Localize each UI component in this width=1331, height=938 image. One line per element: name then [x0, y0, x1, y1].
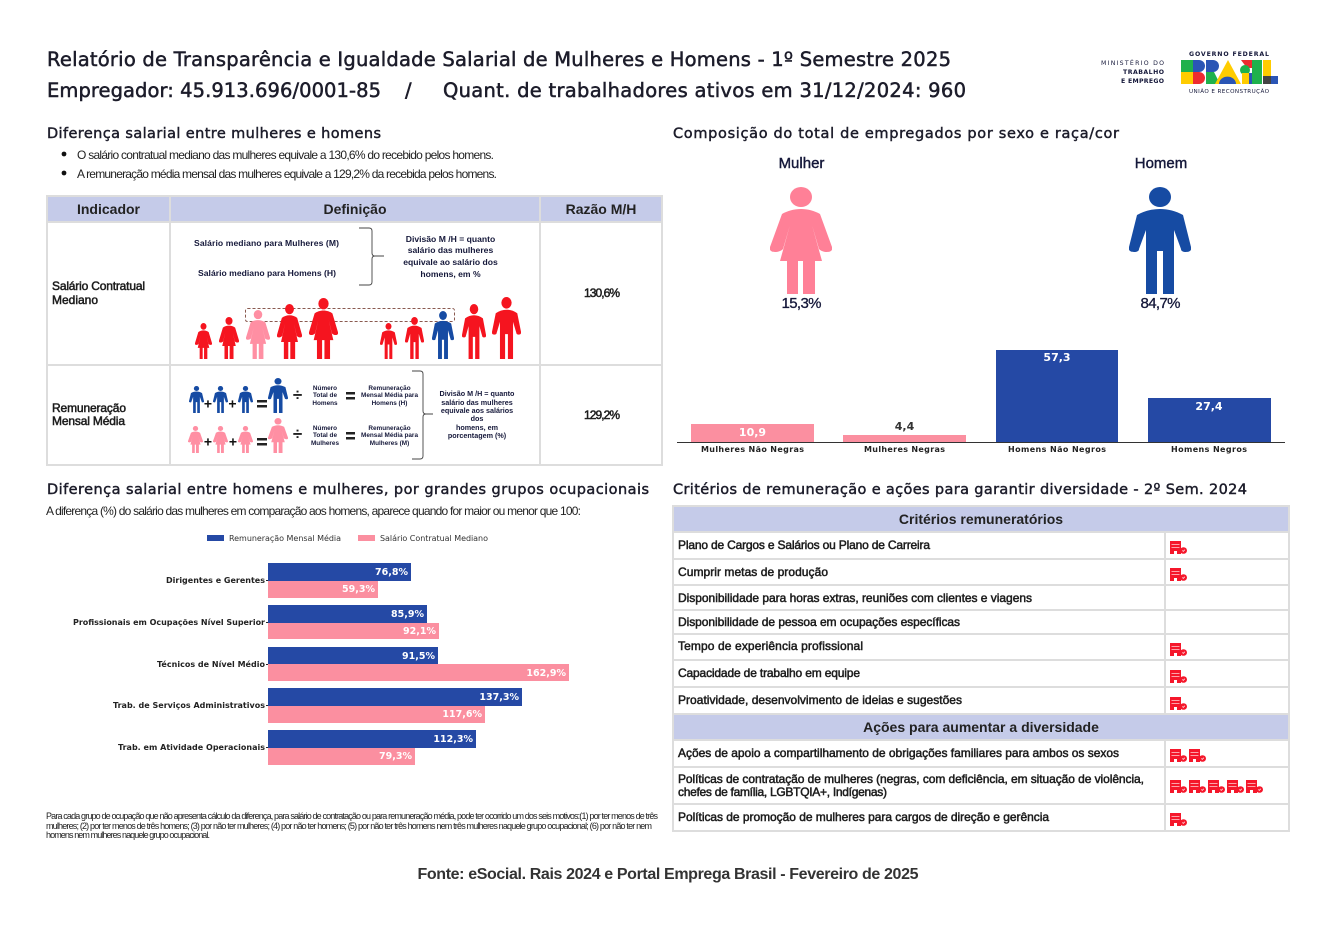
logo: ministério e governo federal	[1101, 51, 1278, 95]
panel: tabela de critérios: Ações para aumentar a diversidade	[863, 719, 1099, 735]
gráfico de barras horizontais: 117,6%	[442, 709, 482, 720]
logo: ministério e governo federal: UNIÃO E RECONSTRUÇÃO	[1189, 88, 1270, 95]
linha: remuneração mensal média: homens, em	[456, 423, 498, 432]
linha: salário contratual mediano: equivale ao salário dos	[403, 257, 498, 267]
heading: critérios: Critérios de remuneração e ações para garantir diversidade - 2º Sem. 2024	[673, 482, 1247, 498]
linha: salário contratual mediano: homens, em %	[420, 269, 481, 279]
gráfico de barras: composição: 4,4	[895, 420, 915, 433]
linha: remuneração mensal média: +	[228, 396, 237, 412]
title	[47, 48, 966, 102]
linha: remuneração mensal média: Mulheres	[311, 440, 339, 447]
legenda: Salário Contratual Mediano	[380, 534, 488, 543]
gráfico de barras horizontais: 76,8%	[375, 567, 408, 578]
figura: mulher 15,3%: Mulher	[779, 155, 824, 172]
linha: remuneração mensal média: Remuneração	[52, 401, 126, 415]
linha: remuneração mensal média: dos	[471, 414, 483, 423]
heading: grupos ocupacionais: Diferença salarial entre homens e mulheres, por grandes grupos ocupacionais	[47, 482, 649, 498]
linha: salário contratual mediano: 130,6%	[584, 286, 620, 300]
gráfico de barras horizontais	[73, 563, 569, 765]
bullet list: A remuneração média mensal das mulheres equivale a 129,2% da recebida pelos homens.	[77, 167, 497, 181]
nota de rodapé: homens nem mulheres naquele grupo ocupacional.	[46, 830, 210, 840]
gráfico de barras horizontais: 85,9%	[391, 609, 424, 620]
panel: tabela de critérios	[672, 505, 1290, 832]
logo: ministério e governo federal: GOVERNO FEDERAL	[1189, 51, 1269, 58]
linha: salário contratual mediano	[52, 228, 620, 359]
linha: remuneração mensal média: 129,2%	[584, 408, 620, 422]
gráfico de barras horizontais: 59,3%	[342, 584, 375, 595]
legenda	[207, 533, 488, 543]
linha: remuneração mensal média: Total de	[313, 432, 337, 439]
heading: composição: Composição do total de empregados por sexo e raça/cor	[673, 126, 1119, 142]
figura: mulher 15,3%	[770, 155, 832, 312]
linha: remuneração mensal média: Mulheres (M)	[370, 440, 409, 447]
panel: tabela de critérios: Políticas de contratação de mulheres (negras, com deficiência, em situação de violência,	[678, 772, 1144, 786]
gráfico de barras: composição: Mulheres Não Negras	[701, 445, 804, 454]
linha: remuneração mensal média: Total de	[313, 392, 337, 399]
gráfico de barras: composição	[677, 350, 1285, 454]
bullet list: O salário contratual mediano das mulheres equivale a 130,6% do recebido pelos homens.	[77, 148, 494, 162]
gráfico de barras: composição: Mulheres Negras	[864, 445, 945, 454]
linha: salário contratual mediano: Salário mediano para Mulheres (M)	[194, 238, 339, 248]
linha: remuneração mensal média: salário das mulheres	[441, 398, 513, 407]
panel: tabela de critérios: Proatividade, desenvolvimento de ideias e sugestões	[678, 693, 962, 707]
figura: homem 84,7%: Homem	[1135, 155, 1187, 172]
gráfico de barras horizontais: 79,3%	[379, 751, 412, 762]
panel: tabela de indicadores: Razão M/H	[566, 201, 636, 217]
linha: salário contratual mediano: Divisão M /H = quanto	[406, 234, 495, 244]
texto: descrição: A diferença (%) do salário das mulheres em comparação aos homens, aparece quando for maior ou menor que 100:	[46, 504, 581, 518]
panel: tabela de critérios: Disponibilidade para horas extras, reuniões com clientes e viagens	[678, 591, 1032, 605]
figura: homem 84,7%: 84,7%	[1140, 295, 1180, 312]
logo: ministério e governo federal: TRABALHO	[1123, 69, 1164, 76]
gráfico de barras: composição: Homens Negros	[1171, 445, 1247, 454]
linha: remuneração mensal média: Mensal Média para	[361, 432, 418, 439]
linha: remuneração mensal média: Homens (H)	[372, 400, 407, 407]
bullet list	[62, 148, 497, 181]
panel: tabela de critérios: Critérios remuneratórios	[899, 511, 1063, 527]
linha: remuneração mensal média: porcentagem (%)	[448, 431, 507, 440]
linha: remuneração mensal média: Homens	[312, 400, 338, 407]
linha: salário contratual mediano: Mediano	[52, 293, 98, 307]
gráfico de barras: composição: 57,3	[1043, 351, 1071, 364]
gráfico de barras horizontais: 137,3%	[479, 692, 519, 703]
title: /	[405, 79, 412, 102]
title: Empregador: 45.913.696/0001-85	[47, 79, 381, 102]
panel: tabela de critérios: Tempo de experiência profissional	[678, 639, 863, 653]
panel: tabela de critérios: chefes de família, LGBTQIA+, Indígenas)	[678, 785, 887, 799]
linha: remuneração mensal média: +	[229, 434, 237, 450]
linha: remuneração mensal média: Número	[313, 385, 337, 392]
gráfico de barras: composição: Homens Não Negros	[1008, 445, 1106, 454]
linha: remuneração mensal média: Mensal Média para	[361, 392, 418, 399]
linha: remuneração mensal média: Divisão M /H = quanto	[440, 389, 515, 398]
linha: salário contratual mediano: Salário Contratual	[52, 279, 145, 293]
panel: tabela de critérios: Ações de apoio a compartilhamento de obrigações familiares para ambos os sexos	[678, 746, 1119, 760]
panel: tabela de critérios: Capacidade de trabalho em equipe	[678, 666, 860, 680]
linha: remuneração mensal média	[52, 371, 620, 459]
title: Relatório de Transparência e Igualdade Salarial de Mulheres e Homens - 1º Semestre 2025	[47, 48, 951, 71]
gráfico de barras horizontais: 91,5%	[402, 651, 435, 662]
panel: tabela de indicadores: Definição	[323, 201, 387, 217]
gráfico de barras horizontais: 92,1%	[403, 626, 436, 637]
linha: remuneração mensal média: Mensal Média	[52, 414, 125, 428]
gráfico de barras horizontais: Trab. de Serviços Administrativos	[113, 701, 265, 710]
figura: mulher 15,3%: 15,3%	[782, 295, 822, 312]
logo: ministério e governo federal: E EMPREGO	[1121, 78, 1164, 85]
nota de rodapé: mulheres; (2) por ter menos de três homens; (3) por não ter mulheres; (4) por não ter homens; (5) por não ter três homens nem três mulheres naquele grupo ocupacional; (6) por não ter nem	[46, 821, 652, 831]
panel: tabela de critérios: Plano de Cargos e Salários ou Plano de Carreira	[678, 538, 930, 552]
gráfico de barras horizontais: Profissionais em Ocupações Nível Superior	[73, 618, 265, 627]
linha: remuneração mensal média: +	[204, 396, 212, 412]
linha: remuneração mensal média: +	[204, 434, 212, 450]
panel: tabela de indicadores: Indicador	[77, 201, 141, 217]
linha: remuneração mensal média: Remuneração	[368, 385, 411, 392]
linha: remuneração mensal média: Remuneração	[368, 425, 411, 432]
ícones de marcação	[1170, 541, 1263, 826]
fonte: Fonte: eSocial. Rais 2024 e Portal Emprega Brasil - Fevereiro de 2025	[418, 866, 919, 883]
figura: homem 84,7%	[1129, 155, 1191, 312]
linha: remuneração mensal média: ÷	[293, 386, 302, 404]
gráfico de barras: composição: 27,4	[1195, 400, 1223, 413]
gráfico de barras horizontais: Dirigentes e Gerentes	[166, 576, 265, 585]
gráfico de barras horizontais: 112,3%	[433, 734, 473, 745]
legenda: Remuneração Mensal Média	[229, 533, 341, 543]
panel: tabela de indicadores	[46, 195, 663, 466]
gráfico de barras horizontais: Técnicos de Nível Médio	[157, 659, 266, 669]
heading: diferença salarial: Diferença salarial entre mulheres e homens	[47, 126, 381, 142]
linha: remuneração mensal média: Número	[313, 425, 337, 432]
linha: remuneração mensal média: equivale aos salários	[441, 406, 513, 415]
panel: tabela de critérios: Cumprir metas de produção	[678, 565, 828, 579]
panel: tabela de critérios: Disponibilidade de pessoa em ocupações específicas	[678, 615, 960, 629]
gráfico de barras horizontais: Trab. em Atividade Operacionais	[118, 743, 265, 752]
panel: tabela de critérios: Políticas de promoção de mulheres para cargos de direção e gerência	[678, 810, 1049, 824]
logo: ministério e governo federal: MINISTÉRIO DO	[1101, 58, 1164, 67]
linha: salário contratual mediano: salário das mulheres	[408, 245, 493, 255]
linha: salário contratual mediano: Salário mediano para Homens (H)	[198, 268, 336, 278]
nota de rodapé: Para cada grupo de ocupação que não apresenta cálculo da diferença, para salário de contratação ou para remuneração média, pode ter ocorrido um dos seis motivos:(1) por ter menos de três	[46, 811, 659, 821]
title: Quant. de trabalhadores ativos em 31/12/2024: 960	[443, 79, 966, 102]
gráfico de barras: composição: 10,9	[739, 426, 766, 439]
nota de rodapé	[46, 811, 659, 840]
linha: remuneração mensal média: ÷	[293, 424, 302, 444]
gráfico de barras horizontais: 162,9%	[526, 668, 566, 679]
